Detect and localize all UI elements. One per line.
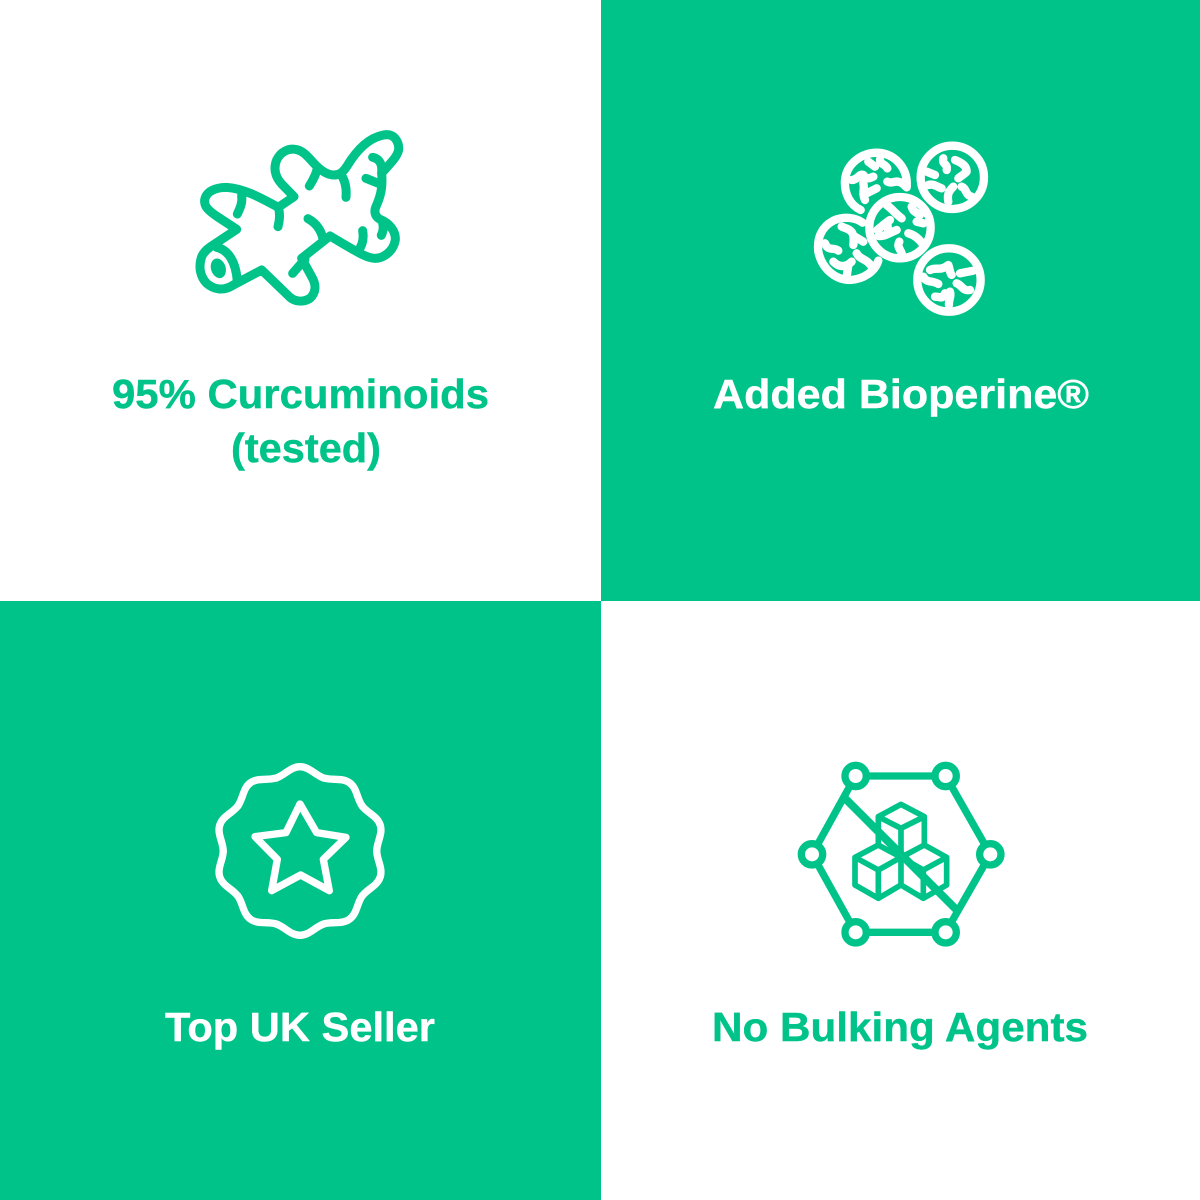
panel: 95% curcuminoids	[0, 0, 601, 601]
icon: crossed-out cubes in hexagon	[801, 765, 1001, 943]
panel: added bioperine	[601, 0, 1200, 601]
heading: No Bulking Agents: No Bulking Agents	[712, 1004, 1088, 1050]
panel: top UK seller	[0, 601, 601, 1200]
heading: tested: (tested)	[231, 425, 381, 471]
icon: star badge	[212, 767, 388, 935]
panel: no bulking agents	[601, 601, 1200, 1200]
icon: turmeric root	[200, 135, 399, 301]
icon: peppercorns	[818, 146, 984, 312]
heading: Top UK Seller: Top UK Seller	[165, 1004, 435, 1050]
heading: 95% Curcuminoids: 95% Curcuminoids	[112, 371, 489, 417]
heading: Added Bioperine: Added Bioperine®	[713, 371, 1089, 417]
